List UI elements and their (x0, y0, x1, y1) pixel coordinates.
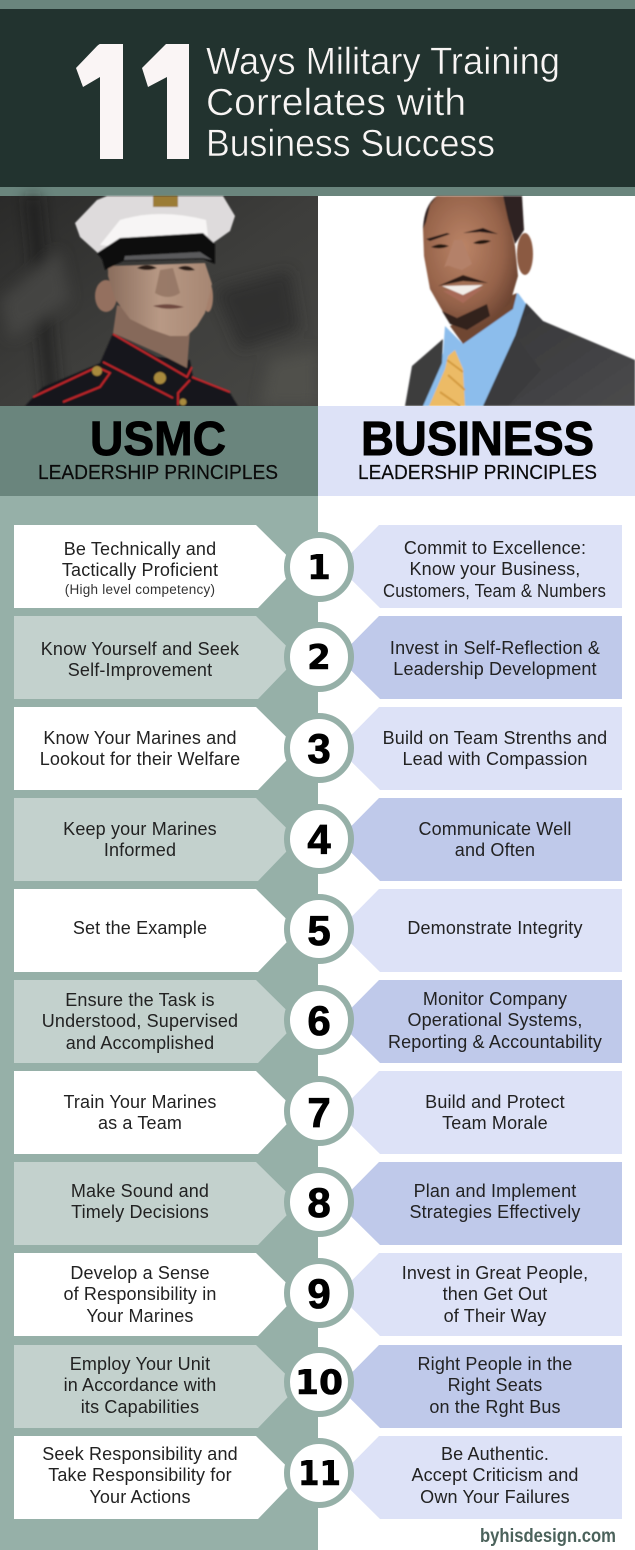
number 5: 5 (307, 907, 331, 954)
row 10 (14, 1345, 622, 1428)
business principle 6: Operational Systems, (407, 1010, 583, 1030)
title text: Ways Military Training (206, 41, 560, 83)
number 4: 4 (307, 816, 331, 863)
number 4 (287, 807, 351, 871)
number 8: 8 (307, 1179, 331, 1226)
USMC principle 8: Make Sound and (71, 1181, 209, 1201)
business principle 7 (338, 1071, 622, 1154)
neck (450, 293, 517, 344)
USMC principle 10: its Capabilities (81, 1397, 199, 1417)
USMC principle 2: Know Yourself and Seek (41, 639, 240, 659)
USMC principle 11: Your Actions (89, 1487, 191, 1507)
number 3: 3 (307, 725, 331, 772)
heading panel: USMC (0, 406, 318, 496)
business principle 1: Know your Business, (410, 559, 580, 579)
USMC principle 8: Timely Decisions (71, 1202, 209, 1222)
row 2 (14, 616, 622, 699)
number 1: 1 (307, 548, 331, 588)
USMC principle 6: Understood, Supervised (42, 1011, 238, 1031)
business principle 1: Commit to Excellence: (404, 538, 586, 558)
USMC principle 7: Train Your Marines (63, 1092, 217, 1112)
business principle 6: Reporting & Accountability (388, 1032, 602, 1052)
business principle 2: Invest in Self-Reflection & (390, 638, 600, 658)
business principle 10 (338, 1345, 622, 1428)
USMC principle 10: in Accordance with (64, 1375, 216, 1395)
USMC principle 2 (14, 616, 298, 699)
USMC principle 4: Informed (104, 840, 176, 860)
number 2 (287, 625, 351, 689)
USMC principle 4 (14, 798, 298, 881)
business principle 8 (338, 1162, 622, 1245)
row 3 (14, 707, 622, 790)
number 10: 10 (295, 1363, 343, 1403)
number 1 (287, 535, 351, 599)
uniform (25, 333, 238, 406)
row 6 (14, 980, 622, 1063)
business principle 3 (338, 707, 622, 790)
title text (206, 41, 560, 165)
cap (75, 196, 235, 255)
suit (483, 303, 635, 406)
neck (113, 305, 190, 368)
number 2: 2 (307, 638, 331, 678)
photo: marine (0, 196, 318, 406)
USMC principle 9: Your Marines (86, 1306, 194, 1326)
USMC principle 10: Employ Your Unit (70, 1354, 210, 1374)
USMC principle 11: Take Responsibility for (48, 1465, 232, 1485)
business principle 11: Accept Criticism and (411, 1465, 579, 1485)
business principle 10: on the Rght Bus (429, 1397, 561, 1417)
heading panel: USMC: USMC (90, 413, 226, 466)
business principle 6: Monitor Company (423, 989, 567, 1009)
business principle 9 (338, 1253, 622, 1336)
title text: Correlates with (206, 82, 466, 124)
business principle 8: Plan and Implement (414, 1181, 576, 1201)
beard (442, 304, 490, 330)
business principle 11 (338, 1436, 622, 1519)
heading panel: Business: LEADERSHIP PRINCIPLES (358, 462, 597, 484)
facial features (426, 228, 498, 241)
USMC principle 8 (14, 1162, 298, 1245)
number 6 (287, 988, 351, 1052)
number 6: 6 (307, 997, 331, 1044)
number 11 (287, 1441, 351, 1505)
number 3 (287, 716, 351, 780)
USMC principle 1: Tactically Proficient (62, 560, 218, 580)
business principle 10: Right People in the (418, 1354, 572, 1374)
head (517, 233, 533, 275)
big number 11: 1 (70, 13, 160, 194)
USMC principle 6: Ensure the Task is (65, 990, 215, 1010)
USMC principle 3 (14, 707, 298, 790)
photo: businessman (318, 196, 635, 406)
USMC principle 6: and Accomplished (66, 1033, 214, 1053)
title banner (0, 0, 635, 196)
number 11: 11 (298, 1454, 341, 1494)
heading panel: Business (318, 406, 635, 496)
USMC principle 1: Be Technically and (64, 539, 216, 559)
business principle 7: Build and Protect (425, 1092, 565, 1112)
number 8 (287, 1170, 351, 1234)
facial features (137, 265, 195, 271)
row 7 (14, 1071, 622, 1154)
row 5 (14, 889, 622, 972)
business principle 3: Lead with Compassion (402, 749, 588, 769)
USMC principle 10 (14, 1345, 298, 1428)
USMC principle 4: Keep your Marines (63, 819, 217, 839)
USMC principle 5: Set the Example (73, 918, 207, 938)
USMC principle 11 (14, 1436, 298, 1519)
business principle 1 (338, 525, 622, 608)
row 9 (14, 1253, 622, 1336)
USMC principle 7 (14, 1071, 298, 1154)
USMC principle 6 (14, 980, 298, 1063)
number 9 (287, 1261, 351, 1325)
row 4 (14, 798, 622, 881)
USMC principle 9 (14, 1253, 298, 1336)
number 7: 7 (307, 1089, 331, 1136)
business principle 3: Build on Team Strenths and (383, 728, 607, 748)
business principle 4: and Often (455, 840, 535, 860)
business principle 10: Right Seats (448, 1375, 542, 1395)
row 8 (14, 1162, 622, 1245)
heading panel: Business: BUSINESS (361, 413, 594, 466)
business principle 9: Invest in Great People, (402, 1263, 588, 1283)
big number 11: 1 (136, 13, 226, 194)
USMC principle 9: of Responsibility in (63, 1284, 217, 1304)
title text: Business Success (206, 123, 495, 165)
business principle 2: Leadership Development (393, 659, 597, 679)
number 10 (287, 1350, 351, 1414)
business principle 6 (338, 980, 622, 1063)
USMC principle 3: Know Your Marines and (43, 728, 237, 748)
USMC principle 1 (14, 525, 298, 608)
USMC principle 7: as a Team (98, 1113, 182, 1133)
business principle 9: then Get Out (443, 1284, 547, 1304)
heading panel: USMC: LEADERSHIP PRINCIPLES (38, 462, 278, 484)
USMC principle 3: Lookout for their Welfare (40, 749, 240, 769)
business principle 4 (338, 798, 622, 881)
business principle 5 (338, 889, 622, 972)
business principle 11: Own Your Failures (420, 1487, 570, 1507)
row 1 (14, 525, 622, 608)
ears and face (95, 280, 117, 312)
business principle 11: Be Authentic. (441, 1444, 549, 1464)
number 7 (287, 1079, 351, 1143)
USMC principle 11: Seek Responsibility and (42, 1444, 238, 1464)
credit: byhisdesign.com: byhisdesign.com (480, 1525, 616, 1547)
USMC principle 5 (14, 889, 298, 972)
business principle 8: Strategies Effectively (409, 1202, 581, 1222)
tie (429, 350, 465, 406)
business principle 1: Customers, Team & Numbers (383, 581, 606, 601)
business principle 2 (338, 616, 622, 699)
USMC principle 2: Self-Improvement (68, 660, 212, 680)
USMC principle 1: (High level competency) (65, 582, 215, 597)
business principle 4: Communicate Well (418, 819, 572, 839)
business principle 7: Team Morale (442, 1113, 548, 1133)
number 5 (287, 897, 351, 961)
big number 11 (76, 44, 189, 159)
number 9: 9 (307, 1270, 331, 1317)
business principle 9: of Their Way (444, 1306, 546, 1326)
row 11 (14, 1436, 622, 1519)
USMC principle 9: Develop a Sense (70, 1263, 210, 1283)
shirt (423, 293, 526, 406)
business principle 5: Demonstrate Integrity (407, 918, 583, 938)
